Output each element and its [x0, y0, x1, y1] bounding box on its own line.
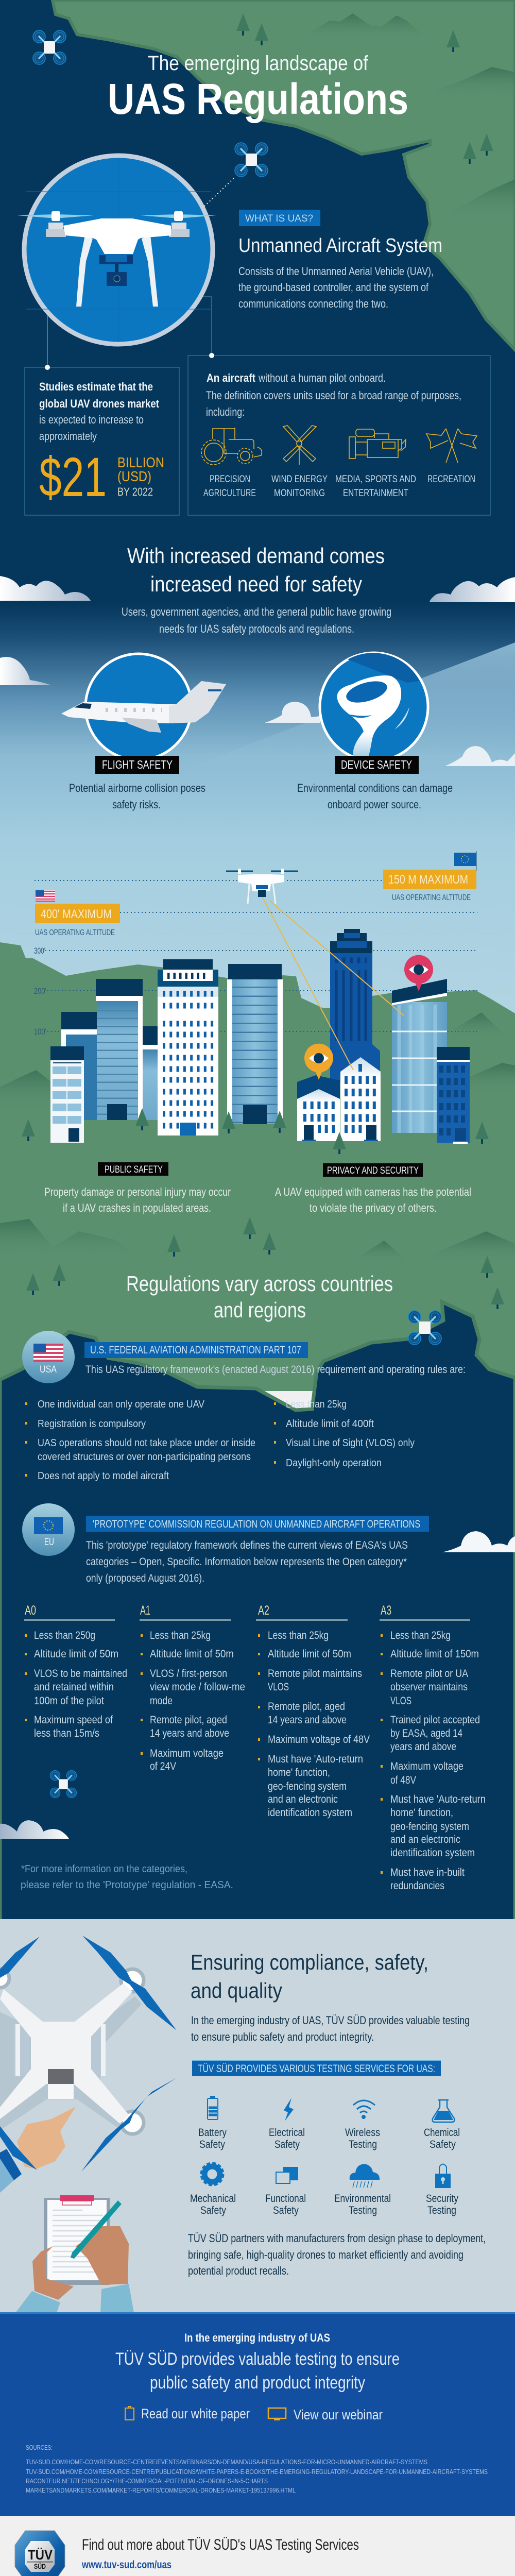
icon: webinar monitor	[268, 2408, 286, 2420]
column: A1: A1	[140, 1603, 150, 1618]
label: flight safety	[95, 756, 179, 774]
column: A1	[140, 1603, 245, 1772]
text: EU framework: only (proposed August 2016).	[86, 1572, 204, 1584]
panel: aircraft definition	[188, 353, 490, 515]
icon: crossed flags	[426, 429, 477, 463]
altitude marker: USA 400 ft: UAS OPERATING ALTITUDE	[35, 928, 115, 937]
illustration: clipboard and pen	[44, 2195, 110, 2285]
label: public safety	[98, 1162, 168, 1176]
illustration: top-down drone with hands	[0, 1936, 177, 2313]
icon: video camera	[349, 429, 406, 459]
altitude scale labels	[34, 946, 46, 1037]
icon: small drone	[33, 30, 66, 64]
text: UAS definition: Consists of the Unmanned Aerial Vehicle (UAV),	[238, 265, 434, 278]
land: hills and middle section	[0, 942, 515, 1391]
sky light diagonal	[175, 642, 515, 773]
column: A2: 14 years and above	[268, 1714, 347, 1726]
text: privacy and security: A UAV equipped with cameras has the potential	[275, 1185, 471, 1198]
text: privacy and security	[275, 1185, 471, 1214]
heading: ensuring compliance: and quality	[191, 1978, 282, 2003]
cloud: right	[442, 1531, 515, 1552]
building: blue central tower	[330, 929, 380, 1082]
altitude marker: EU 150 m: UAS OPERATING ALTITUDE	[392, 893, 471, 902]
column: A2: geo-fencing system	[268, 1781, 347, 1792]
labels: use cases: MONITORING	[274, 488, 325, 499]
building: back-left	[61, 1012, 98, 1120]
illustration: writing hands	[32, 2226, 129, 2300]
mountains: lower land	[0, 1219, 515, 1265]
column: A3: VLOS	[390, 1695, 411, 1707]
list: USA rules: Does not apply to model aircraft	[38, 1470, 169, 1482]
heading: unmanned aircraft system: Unmanned Aircraft System	[238, 235, 442, 257]
text: EU framework	[86, 1539, 408, 1584]
text: device safety: onboard power source.	[328, 798, 421, 811]
label: public safety: PUBLIC SAFETY	[105, 1164, 163, 1175]
panel: aircraft definition: An aircraft	[207, 371, 256, 384]
sources: TUV-SUD.COM/HOME-COM/RESOURCE-CENTRE/EVENTS/WEBINARS/ON-DEMAND/USA-REGULATIONS-FOR-MICRO-UNMANNED-AIRCRAFT-SYSTEMS	[26, 2458, 427, 2466]
heading box: FAA part 107: U.S. FEDERAL AVIATION ADMINISTRATION PART 107	[90, 1344, 301, 1356]
logo: TUV SUD: TÜV	[28, 2547, 53, 2563]
text: users and agencies	[122, 605, 391, 635]
text: device safety: Environmental conditions can damage	[297, 782, 453, 794]
column: A3: observer maintains	[390, 1681, 468, 1693]
clouds: navy-to-sky transition	[0, 576, 515, 766]
illustration: city skyline	[50, 929, 470, 1144]
column: A3: geo-fencing system	[390, 1821, 469, 1833]
column: A1: Maximum voltage	[150, 1748, 224, 1759]
list: USA rules: Less than 25kg	[286, 1398, 347, 1410]
link: white paper: Read our white paper	[141, 2406, 250, 2421]
building: narrow behind	[143, 1026, 158, 1120]
service: wireless testing: Wireless	[345, 2127, 380, 2139]
labels: use cases: RECREATION	[427, 474, 475, 485]
icon: small drone	[408, 1311, 441, 1345]
label: privacy and security: PRIVACY AND SECURITY	[327, 1165, 419, 1176]
column: A2: Remote pilot maintains	[268, 1668, 362, 1680]
stat: 21 billion: (USD)	[117, 468, 151, 484]
logo: TUV SUD	[15, 2531, 65, 2576]
column: A3: years and above	[390, 1741, 456, 1753]
column: A2: VLOS	[268, 1681, 289, 1693]
text: flight safety	[69, 782, 205, 811]
text: users and agencies: Users, government agencies, and the general public have growing	[122, 605, 391, 618]
text: public safety	[44, 1185, 231, 1214]
column: A1: VLOS / first-person	[150, 1668, 227, 1680]
text: UAS definition: communications connecting the two.	[238, 297, 388, 310]
sources: RACONTEUR.NET/TECHNOLOGY/THE-COMMERCIAL-POTENTIAL-OF-DRONES-IN-5-CHARTS	[26, 2477, 268, 2485]
service: environmental testing: Environmental	[334, 2193, 391, 2205]
footer background	[0, 2516, 515, 2576]
list: USA rules: Visual Line of Sight (VLOS) only	[286, 1437, 415, 1449]
column: A0: and retained within	[34, 1681, 114, 1693]
title: The emerging landscape of	[148, 52, 369, 75]
mountains: top land	[296, 13, 515, 222]
labels: use cases: MEDIA, SPORTS AND	[335, 474, 416, 485]
footer: find out more: Find out more about TÜV SÜD's UAS Testing Services	[82, 2536, 359, 2553]
column: A2: identification system	[268, 1807, 352, 1819]
text: UAS definition	[238, 265, 434, 310]
column: A3: Altitude limit of 150m	[390, 1648, 479, 1660]
text: partnership paragraph: bringing safe, high-quality drones to market efficiently and avoiding	[188, 2248, 464, 2261]
heading box: prototype regulation: 'PROTOTYPE' COMMISSION REGULATION ON UNMANNED AIRCRAFT OPERATIONS	[93, 1518, 420, 1530]
altitude dotted lines	[35, 880, 477, 1031]
label: device safety: DEVICE SAFETY	[341, 758, 412, 771]
heading: ensuring compliance	[191, 1950, 428, 2003]
panel: market estimate: global UAV drones market	[39, 397, 160, 410]
icon: small drone	[50, 1771, 77, 1798]
column: A3: Must have in-built	[390, 1867, 465, 1878]
column: A1: Altitude limit of 50m	[150, 1648, 234, 1660]
panel: aircraft definition: The definition covers units used for a broad range of purposes,	[206, 389, 461, 402]
icon: wind turbine	[283, 426, 316, 465]
mountains: city area	[0, 1012, 515, 1113]
background: sky gradient	[0, 603, 515, 1041]
panel: call to action: public safety and product integrity	[150, 2373, 365, 2393]
service: mechanical safety	[190, 2163, 236, 2216]
text: testing intro: to ensure public safety and product integrity.	[191, 2030, 374, 2043]
column: A3: Trained pilot accepted	[390, 1714, 480, 1726]
sources	[26, 2444, 488, 2494]
text: flight safety: safety risks.	[112, 798, 161, 811]
altitude scale labels: 200'	[34, 986, 46, 996]
stat: 21 billion: BILLION	[117, 454, 164, 470]
labels: use cases	[203, 474, 475, 499]
service: chemical safety	[424, 2100, 460, 2150]
column: A0: Maximum speed of	[34, 1714, 113, 1726]
service: electrical safety	[269, 2098, 305, 2150]
badge: EU: EU	[44, 1537, 54, 1548]
text: partnership paragraph: potential product recalls.	[188, 2264, 289, 2277]
column: A0: A0	[25, 1603, 36, 1618]
column: A1: Less than 25kg	[150, 1630, 211, 1641]
column: A3: by EASA, aged 14	[390, 1727, 462, 1739]
column: A3: Must have 'Auto-return	[390, 1793, 486, 1805]
icon: small drone	[235, 143, 268, 177]
cloud: left	[0, 1820, 69, 1839]
list: USA rules: Daylight-only operation	[286, 1457, 382, 1469]
illustration: cuffs	[15, 2284, 134, 2313]
trees: city and land	[22, 1108, 504, 1309]
background: compliance panel	[0, 1919, 515, 2313]
column: A1: of 24V	[150, 1760, 176, 1772]
labels: use cases: PRECISION	[210, 474, 250, 485]
building: right houses	[297, 1057, 381, 1141]
panel: market estimate: Studies estimate that the	[39, 380, 153, 393]
list: USA rules: Registration is compulsory	[38, 1418, 146, 1430]
column: A0: Less than 250g	[34, 1630, 95, 1641]
sources: SOURCES:	[26, 2444, 53, 2451]
line of sight beams	[263, 897, 404, 1070]
column: A3: home' function,	[390, 1807, 453, 1819]
column: A0: Altitude limit of 50m	[34, 1648, 118, 1660]
text: users and agencies: needs for UAS safety protocols and regulations.	[159, 622, 354, 635]
heading box: FAA part 107	[84, 1342, 308, 1358]
heading: increased demand	[127, 544, 385, 596]
heading: ensuring compliance: Ensuring compliance, safety,	[191, 1950, 428, 1974]
background: navy top section	[0, 0, 515, 639]
column: A3: of 48V	[390, 1774, 416, 1786]
footnote: *For more information on the categories,	[21, 1863, 187, 1875]
panel: market estimate: approximately	[39, 430, 97, 443]
labels: use cases: WIND ENERGY	[271, 474, 328, 485]
column: A3: redundancies	[390, 1880, 444, 1892]
label: flight safety: FLIGHT SAFETY	[102, 758, 173, 771]
labels: use cases: AGRICULTURE	[203, 488, 256, 499]
text: public safety: Property damage or personal injury may occur	[44, 1185, 231, 1198]
building: slanted glass right	[392, 979, 447, 1133]
service: battery safety: Battery	[198, 2127, 227, 2139]
column: A2	[256, 1603, 370, 1819]
panel: aircraft definition: without a human pilot onboard.	[258, 371, 386, 384]
sources: MARKETSANDMARKETS.COM/MARKET-REPORTS/COMMERCIAL-DRONES-MARKET-195137996.HTML	[26, 2486, 296, 2494]
building: glass tower centre	[227, 964, 283, 1124]
list: USA rules: covered structures or over non-participating persons	[38, 1451, 251, 1463]
service: functional safety: Safety	[273, 2205, 299, 2216]
dotted connector	[203, 178, 234, 207]
column: A0: VLOS to be maintained	[34, 1668, 127, 1680]
land: top coast	[53, 0, 515, 350]
badge: EU	[22, 1503, 75, 1556]
panel: call to action: TÜV SÜD provides valuable testing to ensure	[115, 2349, 400, 2369]
text: UAS definition: the ground-based controller, and the system of	[238, 281, 429, 294]
column: A1: Remote pilot, aged	[150, 1714, 227, 1726]
service: security testing	[426, 2164, 458, 2216]
building: white office	[158, 959, 218, 1136]
altitude scale labels: 100'	[34, 1027, 46, 1037]
service: mechanical safety: Mechanical	[190, 2193, 236, 2205]
panel: call to action	[0, 2312, 515, 2516]
labels: use cases: ENTERTAINMENT	[343, 488, 408, 499]
column: A2: Remote pilot, aged	[268, 1701, 345, 1713]
panel: aircraft definition: including:	[206, 405, 245, 418]
text: public safety: if a UAV crashes in populated areas.	[63, 1201, 211, 1214]
column: A3	[380, 1603, 486, 1892]
text: testing intro	[191, 2014, 470, 2043]
text: privacy and security: to violate the privacy of others.	[310, 1201, 437, 1214]
icon: orange eye pin	[304, 1044, 333, 1080]
column: A2: home' function,	[268, 1767, 330, 1778]
badge: USA: USA	[40, 1364, 57, 1375]
heading: increased demand: increased need for safety	[150, 572, 362, 596]
list: USA rules	[25, 1398, 415, 1482]
service: battery safety	[198, 2096, 227, 2150]
stat: 21 billion: $21	[39, 446, 107, 508]
altitude marker: USA 400 ft: 400' MAXIMUM	[41, 907, 112, 921]
footer: url: www.tuv-sud.com/uas	[81, 2559, 171, 2571]
column: A0	[24, 1603, 127, 1739]
footnote: please refer to the 'Prototype' regulation - EASA.	[21, 1879, 233, 1891]
column: A3: A3	[381, 1603, 391, 1618]
heading: regulations vary: Regulations vary across countries	[126, 1272, 393, 1296]
link: webinar: View our webinar	[294, 2407, 383, 2422]
service: functional safety: Functional	[265, 2193, 306, 2205]
icon: device safety tornado	[320, 653, 428, 761]
column: A0: less than 15m/s	[34, 1727, 99, 1739]
icon: white paper	[125, 2406, 134, 2420]
service: wireless testing	[345, 2100, 380, 2150]
list: USA rules: UAS operations should not take place under or inside	[38, 1437, 255, 1449]
service: functional safety	[265, 2167, 306, 2216]
column: A0: 100m of the pilot	[34, 1695, 104, 1707]
service: chemical safety: Safety	[430, 2139, 456, 2150]
badge: USA	[22, 1331, 75, 1383]
stat: 21 billion: BY 2022	[117, 485, 153, 498]
icon: camera drone over city	[226, 869, 298, 904]
heading box: testing services	[192, 2060, 441, 2076]
logo: TUV SUD: SÜD	[34, 2562, 46, 2570]
label: privacy and security	[323, 1163, 423, 1177]
altitude marker: EU 150 m	[383, 851, 476, 902]
column: A3: Maximum voltage	[390, 1760, 464, 1772]
building: front-left white	[50, 1046, 84, 1143]
column: A3: Remote pilot or UA	[390, 1668, 468, 1680]
panel: market estimate	[25, 365, 179, 515]
service: electrical safety: Electrical	[269, 2127, 305, 2139]
illustration: pointing hand	[0, 2107, 76, 2193]
text: EU framework: categories – Open, Specific. Information below represents the Open category*	[86, 1555, 407, 1568]
service: electrical safety: Safety	[274, 2139, 300, 2150]
footnote	[21, 1863, 233, 1891]
column: A2: Must have 'Auto-return	[268, 1753, 363, 1765]
building: front-right blue	[437, 1047, 470, 1144]
background: navy regulations sea	[0, 1302, 515, 1922]
list: USA rules: Altitude limit of 400ft	[286, 1418, 374, 1430]
altitude scale labels: 300'	[34, 946, 45, 956]
text: flight safety: Potential airborne collision poses	[69, 782, 205, 794]
column: A2: Altitude limit of 50m	[268, 1648, 351, 1660]
panel: market estimate: is expected to increase to	[39, 413, 144, 426]
column: A3: Less than 25kg	[390, 1630, 451, 1641]
column: A3: identification system	[390, 1847, 475, 1859]
column: A1: mode	[150, 1695, 173, 1707]
service: mechanical safety: Safety	[200, 2205, 226, 2216]
column: A2: Less than 25kg	[268, 1630, 329, 1641]
service: security testing: Security	[426, 2193, 458, 2205]
icon: flight safety plane	[61, 654, 226, 760]
icon: tractor	[201, 428, 262, 465]
column: A2: and an electronic	[268, 1793, 338, 1805]
column: A2: Maximum voltage of 48V	[268, 1734, 370, 1745]
heading: regulations vary: and regions	[214, 1298, 306, 1322]
title: UAS Regulations	[108, 75, 408, 123]
service: environmental testing: Testing	[349, 2205, 377, 2216]
trees: top land	[236, 13, 493, 164]
icon: red eye pin	[404, 955, 433, 991]
building: glass tower left	[96, 979, 143, 1120]
heading: regulations vary	[126, 1272, 393, 1322]
leader lines	[47, 297, 212, 367]
heading box: testing services: TÜV SÜD PROVIDES VARIOUS TESTING SERVICES FOR UAS:	[198, 2063, 435, 2075]
list: USA rules: One individual can only operate one UAV	[38, 1398, 204, 1410]
title	[108, 52, 408, 123]
column: A1: 14 years and above	[150, 1727, 229, 1739]
label: what is UAS: WHAT IS UAS?	[245, 213, 313, 224]
heading box: prototype regulation	[86, 1516, 429, 1532]
label: device safety	[335, 756, 419, 774]
altitude marker: EU 150 m: 150 M MAXIMUM	[388, 873, 468, 887]
altitude marker: USA 400 ft	[35, 890, 120, 937]
label: what is UAS	[239, 210, 320, 226]
column: A3: and an electronic	[390, 1834, 460, 1845]
service: chemical safety: Chemical	[424, 2127, 460, 2139]
heading: increased demand: With increased demand comes	[127, 544, 385, 568]
service: security testing: Testing	[427, 2205, 456, 2216]
panel: call to action: In the emerging industry of UAS	[184, 2331, 330, 2344]
service: battery safety: Safety	[199, 2139, 225, 2150]
service: wireless testing: Testing	[349, 2139, 377, 2150]
text: device safety	[297, 782, 453, 811]
column: A1: view mode / follow-me	[150, 1681, 245, 1693]
service: environmental testing	[334, 2164, 391, 2216]
column: A2: A2	[258, 1603, 269, 1618]
big drone illustration	[17, 156, 216, 344]
text: EU framework: This 'prototype' regulatory framework defines the current views of EASA's UAS	[86, 1539, 408, 1551]
text: partnership paragraph	[188, 2232, 486, 2277]
